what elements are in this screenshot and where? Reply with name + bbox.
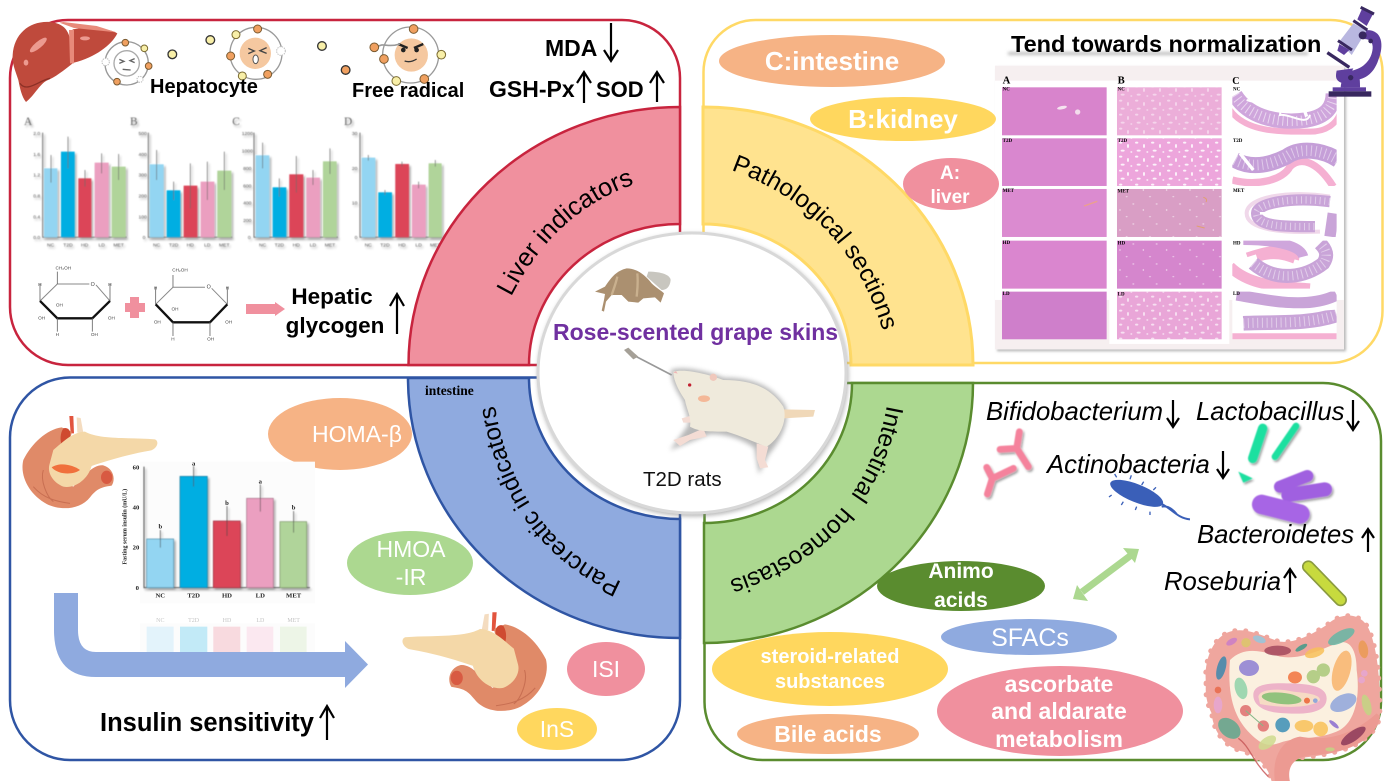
row labels: MET — [1233, 189, 1245, 194]
ellipse: ISI: ISI — [592, 656, 620, 682]
row labels: LD — [1233, 292, 1240, 297]
label: Lactobacillus down: Lactobacillus — [1196, 398, 1345, 426]
chart: fasting serum insulin: LD — [256, 592, 265, 599]
label: Insulin sensitivity up: Insulin sensitivity — [100, 709, 315, 737]
icon: free radical dots — [168, 36, 350, 74]
ellipse: SFACs: SFACs — [991, 624, 1069, 652]
label: Bacteroidetes up: Bacteroidetes — [1197, 521, 1354, 549]
icon: glucose ring 2 — [154, 268, 232, 342]
icon: glucose ring 1: H — [108, 282, 112, 287]
ellipse: steroid-related substances — [712, 632, 948, 706]
icon: glucose ring 1 — [38, 265, 115, 337]
bar chart C: SOD: MET — [325, 243, 335, 249]
label: Hepatocyte: Hepatocyte — [150, 76, 258, 98]
row labels: T2D — [1233, 139, 1243, 144]
bar chart B: GSH-Px: HD — [187, 243, 194, 249]
ellipse: HOMA-IR: HMOA — [376, 536, 446, 562]
bar chart D: hepatic glycogen: NC — [365, 243, 372, 249]
ellipse: Animo acids: Animo — [928, 560, 994, 583]
ellipse: ascorbate and aldarate metabolism: metabolism — [995, 726, 1123, 752]
ellipse: InS — [517, 708, 597, 750]
column C: intestine tissue — [1230, 87, 1340, 339]
reflection: T2D — [188, 618, 200, 624]
reflection: MET — [287, 618, 300, 624]
icon: free radical face — [370, 25, 446, 85]
label: Roseburia up: Roseburia — [1164, 568, 1281, 596]
bars — [144, 466, 310, 588]
bar chart C: SOD: 1000 — [242, 148, 253, 154]
icon: microscope — [1327, 7, 1381, 97]
bar chart A: MDA: MET — [113, 243, 124, 249]
ellipse: ascorbate and aldarate metabolism: and aldarate — [991, 698, 1127, 724]
bar chart C: SOD: LD — [310, 243, 317, 249]
icon: glucose ring 1: OH — [56, 303, 63, 308]
chart: fasting serum insulin: b — [292, 504, 296, 511]
row labels: MET — [1118, 190, 1130, 195]
bar chart D: hepatic glycogen: MET — [430, 243, 441, 249]
ellipse: steroid-related substances: steroid-related — [761, 646, 899, 668]
icon: glucose ring 2: H — [171, 337, 175, 342]
bar chart A: MDA: LD — [98, 243, 105, 249]
bar chart A: MDA: 1.6 — [33, 152, 40, 158]
label: SOD up: SOD — [596, 77, 644, 102]
bar chart C: SOD: 600 — [243, 183, 252, 189]
sector: Intestinal homeostasis — [702, 382, 974, 644]
bar chart B: GSH-Px — [130, 116, 232, 249]
chart: fasting serum insulin: a — [192, 460, 196, 467]
label: Hepatic glycogen up — [286, 284, 404, 338]
reflection: NC — [156, 618, 164, 624]
icon: glucose ring 1: H — [56, 332, 59, 337]
ellipse: HOMA-IR — [347, 531, 473, 595]
ellipse: A liver: liver — [930, 187, 970, 208]
bar chart A: MDA: T2D — [63, 243, 73, 249]
row labels: T2D — [1003, 139, 1012, 144]
row labels: HD — [1003, 241, 1011, 246]
icon: glucose ring 1: OH — [91, 332, 98, 337]
label: Hepatic glycogen up: Hepatic — [291, 284, 373, 309]
row labels: NC — [1233, 88, 1241, 93]
icon: bacteroidetes — [1262, 476, 1325, 514]
ellipse: A liver: A: — [940, 163, 960, 184]
row labels: MET — [1003, 189, 1015, 194]
label: SOD up — [596, 72, 664, 102]
icon: glucose ring 2: H — [154, 285, 157, 290]
label: Actinobacteria down: Actinobacteria — [1045, 451, 1210, 479]
bar chart B: GSH-Px: 100 — [138, 214, 147, 220]
label: Free radical: Free radical — [352, 80, 464, 102]
row labels: NC — [1003, 88, 1010, 93]
chart: fasting serum insulin: 40 — [133, 504, 140, 511]
label: Hepatic glycogen up: glycogen — [286, 313, 384, 338]
bar chart A: MDA: 1.2 — [33, 173, 40, 179]
ellipse: ISI — [567, 642, 645, 696]
panel: pancreatic indicators — [8, 376, 682, 762]
ellipse: C intestine: C:intestine — [765, 46, 899, 76]
panel: intestinal homeostasis — [702, 382, 1382, 781]
icon: actinobacteria — [1107, 474, 1190, 519]
label: Rose-scented grape skins: Rose-scented grape skins — [553, 319, 838, 345]
chart: fasting serum insulin: 60 — [133, 464, 140, 471]
bar chart C: SOD: C — [232, 116, 240, 128]
bar chart A: MDA — [24, 116, 127, 249]
icon: pancreas recovered — [402, 612, 547, 711]
icon: grape skin powder — [595, 268, 671, 312]
chart: fasting serum insulin: 20 — [133, 544, 140, 551]
bar chart C: SOD: T2D — [275, 243, 284, 249]
bar chart A: MDA: 2.0 — [33, 131, 40, 137]
bar chart B: GSH-Px: B — [130, 116, 138, 128]
chart: fasting serum insulin: T2D — [187, 592, 200, 599]
column A: liver tissue — [1002, 87, 1107, 339]
sector label: Intestinal homeostasis: Intestinal homeostasis — [731, 407, 904, 592]
ellipse: B kidney: B:kidney — [848, 104, 958, 134]
row labels: HD — [1118, 242, 1126, 247]
ellipse: Animo acids — [877, 560, 1045, 612]
icon: T2D rat with gavage needle — [624, 348, 815, 468]
icon: glucose ring 1: H — [38, 282, 42, 287]
bar chart D: hepatic glycogen: HD — [398, 243, 406, 249]
column B: kidney tissue — [1117, 87, 1222, 339]
icon: glucose ring 2: H — [226, 285, 229, 290]
sector: Liver indicators — [407, 106, 682, 366]
ellipse: ascorbate and aldarate metabolism: ascorbate — [1005, 671, 1113, 697]
icon: lactobacillus — [1238, 426, 1296, 483]
chart: fasting serum insulin: Fasting serum insulin (mU/L) — [122, 489, 129, 564]
icon: glucose ring 1: CH₂OH — [56, 265, 71, 270]
icon: glucose ring 2: O — [207, 285, 211, 291]
icon: bifidobacterium — [987, 432, 1028, 494]
bar chart C: SOD: 1200 — [242, 131, 253, 137]
ellipse: HOMA-IR: -IR — [396, 564, 426, 590]
chart: fasting serum insulin: MET — [286, 592, 302, 599]
ellipse: HOMA-beta: HOMA-β — [312, 421, 402, 447]
ellipse: Animo acids: acids — [934, 589, 988, 612]
row labels: LD — [1003, 292, 1010, 297]
icon: glucose ring 2: OH — [154, 319, 161, 324]
bar chart C: SOD: HD — [293, 243, 300, 249]
bar chart B: GSH-Px: LD — [204, 243, 211, 249]
chart: fasting serum insulin: HD — [222, 592, 232, 599]
bar chart C: SOD — [232, 116, 338, 249]
icon: glucose ring 2: CH₂OH — [172, 268, 188, 273]
chart: fasting serum insulin: b — [158, 523, 162, 530]
bar chart B: GSH-Px: 200 — [138, 193, 147, 199]
sector label: Pancreatic indicators: Pancreatic indicators — [482, 407, 620, 596]
bar chart D: hepatic glycogen: T2D — [380, 243, 390, 249]
arrow: double-headed green — [1073, 548, 1139, 601]
bar chart A: MDA: NC — [47, 243, 55, 249]
icon: glucose ring 1: OH — [108, 315, 115, 320]
histology image panel — [995, 66, 1344, 349]
reflection: LD — [256, 618, 265, 624]
icon: glucose ring 2: OH — [171, 307, 178, 312]
bar chart A: MDA: 0.8 — [33, 193, 40, 199]
bar chart A: MDA: 0.4 — [33, 214, 40, 220]
bar chart C: SOD: 400 — [243, 201, 252, 207]
bar chart D: hepatic glycogen: 20 — [352, 166, 358, 172]
icon: glucose ring 1: O — [91, 282, 95, 288]
label: T2D rats: T2D rats — [643, 468, 722, 491]
ellipse: Bile acids — [737, 714, 919, 754]
bar chart C: SOD: NC — [259, 243, 267, 249]
small label: intestine: intestine — [425, 383, 474, 398]
icon: healthy hepatocyte — [102, 39, 152, 85]
histology image panel: A — [1003, 75, 1011, 86]
bar chart B: GSH-Px: 300 — [138, 173, 147, 179]
ellipse: A liver — [903, 158, 999, 210]
row labels: T2D — [1118, 139, 1127, 144]
ellipse: ascorbate and aldarate metabolism — [937, 666, 1183, 756]
arrow: to hepatic glycogen — [246, 302, 285, 316]
sector: Pathological sections — [702, 106, 974, 366]
chart: fasting serum insulin: b — [225, 500, 229, 507]
panel: liver indicators — [8, 18, 682, 366]
icon: gut microbiota — [1206, 616, 1380, 781]
bar chart A: MDA: A — [24, 116, 33, 128]
reflection — [147, 618, 307, 653]
icon: pancreas with damage — [22, 416, 157, 508]
histology image panel: B — [1118, 75, 1125, 86]
label: GSH-Px up: GSH-Px — [489, 76, 575, 102]
arrow: large blue bent — [54, 593, 368, 688]
sector: Pancreatic indicators — [406, 378, 682, 640]
bar chart D: hepatic glycogen: 0 — [355, 235, 358, 241]
sector label: Pathological sections: Pathological sections — [733, 154, 894, 330]
row labels: NC — [1118, 88, 1125, 93]
bar chart C: SOD: 800 — [243, 166, 252, 172]
icon: roseburia — [1308, 567, 1341, 600]
chart: fasting serum insulin: NC — [156, 592, 165, 599]
chart: fasting serum insulin: 0 — [136, 585, 140, 592]
bar chart B: GSH-Px: 500 — [138, 131, 147, 137]
histology image panel: C — [1232, 76, 1240, 87]
bar chart B: GSH-Px: MET — [219, 243, 230, 249]
label: Bifidobacterium down: Bifidobacterium — [986, 398, 1163, 426]
bar chart D: hepatic glycogen: 10 — [352, 201, 358, 207]
bar chart D: hepatic glycogen: D — [344, 116, 352, 128]
ellipse: Bile acids: Bile acids — [774, 721, 882, 747]
bar chart D: hepatic glycogen — [344, 116, 442, 249]
reflection: HD — [223, 618, 232, 624]
chart: fasting serum insulin: a — [259, 478, 263, 485]
bar chart A: MDA: HD — [81, 243, 89, 249]
bar chart B: GSH-Px: 400 — [138, 152, 147, 158]
icon: glucose ring 2: OH — [207, 337, 214, 342]
bar chart B: GSH-Px: NC — [153, 243, 161, 249]
label: MDA down — [545, 23, 618, 61]
ellipse: InS: InS — [540, 716, 574, 742]
center circle: treatment — [538, 233, 846, 513]
panel: pathological sections — [702, 6, 1384, 366]
ellipse: B kidney — [810, 97, 996, 141]
bar chart C: SOD: 200 — [243, 218, 252, 224]
bar chart D: hepatic glycogen: 30 — [352, 131, 358, 137]
bar chart D: hepatic glycogen: LD — [415, 243, 422, 249]
row labels: HD — [1233, 242, 1241, 247]
title: Tend towards normalization: Tend towards normalization — [1011, 31, 1321, 57]
ellipse: SFACs — [941, 619, 1117, 655]
label: MDA down: MDA — [545, 35, 597, 61]
row labels: LD — [1118, 293, 1125, 298]
ellipse: HOMA-beta — [268, 398, 412, 470]
chart: fasting serum insulin — [122, 460, 315, 653]
icon: glucose ring 1: OH — [38, 315, 45, 320]
icon: stressed hepatocyte — [227, 25, 285, 80]
ellipse: C intestine — [719, 35, 945, 87]
row labels — [1003, 88, 1245, 298]
sector label: Liver indicators: Liver indicators — [496, 173, 632, 295]
ellipse: steroid-related substances: substances — [775, 671, 885, 693]
icon: plus sign — [125, 297, 145, 318]
bar chart A: MDA: 0.0 — [33, 235, 40, 241]
bar chart B: GSH-Px: T2D — [169, 243, 179, 249]
icon: glucose ring 2: OH — [225, 319, 232, 324]
bar chart B: GSH-Px: 0 — [143, 235, 146, 241]
icon: liver — [13, 22, 117, 102]
bar chart C: SOD: 0 — [248, 235, 251, 241]
